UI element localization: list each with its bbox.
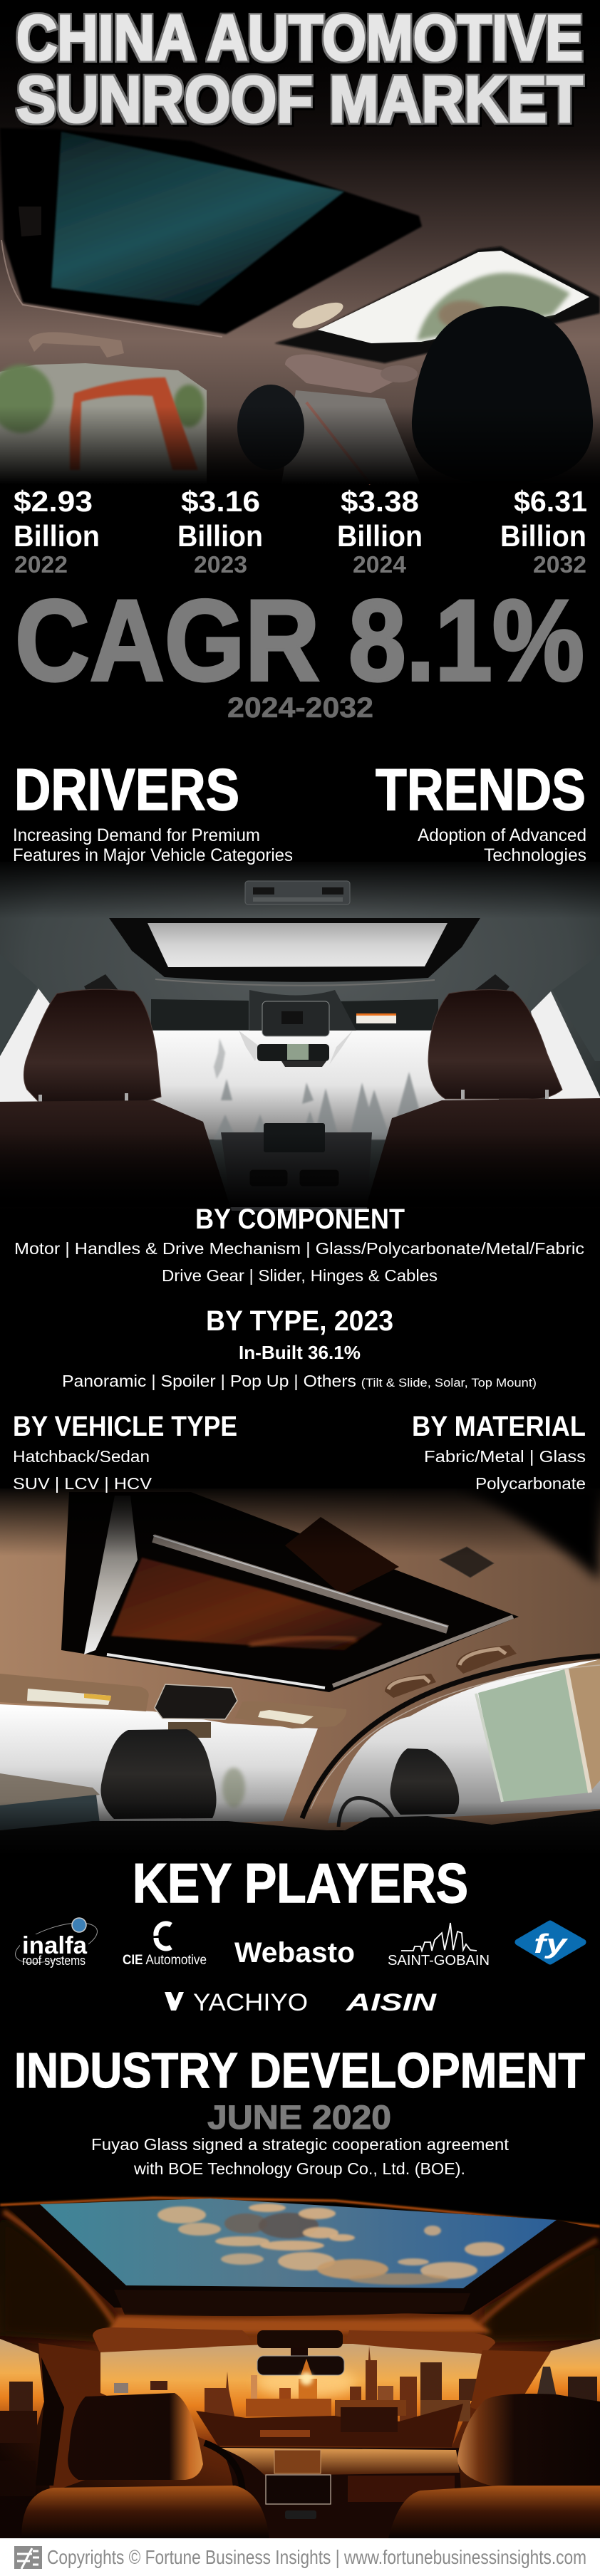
side window right bbox=[531, 991, 600, 1111]
panel: by vehicle type: SUV | LCV | HCV bbox=[13, 1474, 152, 1493]
stat: 2032: 2032 bbox=[533, 551, 586, 578]
logo: Saint-Gobain bbox=[388, 1923, 490, 1968]
panel: drivers: Features in Major Vehicle Categories bbox=[13, 845, 293, 865]
sun visors bbox=[0, 1674, 149, 1711]
panel: by material: BY MATERIAL bbox=[412, 1411, 586, 1442]
logo: CIE Automotive: CIE Automotive bbox=[123, 1953, 207, 1968]
sky through sunroof bbox=[40, 2199, 557, 2288]
stat: 2024: Billion bbox=[337, 519, 423, 553]
heading: by type: BY TYPE, 2023 bbox=[206, 1305, 393, 1337]
panel: trends: Technologies bbox=[484, 845, 586, 865]
sun visors bbox=[151, 999, 249, 1030]
stat: 2023: $3.16 bbox=[181, 485, 260, 518]
logo: Aisin: AISIN bbox=[346, 1989, 438, 2016]
development description: Fuyao Glass signed a strategic cooperation agreement bbox=[91, 2135, 510, 2154]
grab handles bbox=[456, 1645, 517, 1674]
windshield bbox=[107, 1031, 499, 1140]
stat: 2022: Billion bbox=[14, 519, 100, 553]
front left headrest bbox=[100, 1729, 217, 1819]
panel: trends bbox=[376, 756, 586, 865]
rearview mirror bbox=[257, 2347, 344, 2385]
side window left bbox=[0, 989, 56, 1104]
steering wheel bbox=[205, 2443, 242, 2493]
left seat bbox=[21, 2486, 269, 2538]
development description bbox=[91, 2135, 510, 2178]
sunroof opening bbox=[61, 1492, 519, 1692]
sunroof frame bbox=[7, 2199, 600, 2315]
stat: 2032: $6.31 bbox=[514, 485, 587, 518]
development date: JUNE 2020 bbox=[207, 2098, 391, 2136]
stat: 2023: 2023 bbox=[194, 551, 247, 578]
windshield bbox=[100, 2344, 482, 2447]
development description: with BOE Technology Group Co., Ltd. (BOE). bbox=[133, 2159, 465, 2178]
stat: 2024: $3.38 bbox=[341, 485, 419, 518]
stat: 2024 bbox=[337, 485, 423, 578]
overhead console bbox=[155, 1684, 237, 1719]
logo: inalfa roof systems bbox=[11, 1915, 102, 1971]
heading: by component: BY COMPONENT bbox=[195, 1204, 405, 1235]
stat: 2023: Billion bbox=[177, 519, 263, 553]
pillars bbox=[38, 2343, 100, 2493]
overhead control panel bbox=[245, 881, 350, 904]
title bbox=[16, 3, 583, 136]
panel: by material: Polycarbonate bbox=[475, 1474, 586, 1493]
icon: Fortune Business Insights logo bbox=[14, 2546, 42, 2569]
logo: CIE Automotive bbox=[123, 1924, 207, 1968]
stat: 2022: 2022 bbox=[14, 551, 68, 578]
stat: 2032: Billion bbox=[500, 519, 586, 553]
CAGR period: 2024-2032 bbox=[227, 692, 373, 724]
right headrest bbox=[457, 2394, 600, 2488]
logo: Saint-Gobain: SAINT-GOBAIN bbox=[388, 1953, 490, 1968]
panel: by vehicle type: BY VEHICLE TYPE bbox=[13, 1411, 237, 1442]
stat: 2022 bbox=[14, 485, 100, 578]
panel: by material: Fabric/Metal | Glass bbox=[424, 1447, 586, 1466]
panel: drivers bbox=[13, 756, 293, 865]
image: sunroof interior hero bbox=[0, 0, 600, 484]
right seat bbox=[365, 1098, 600, 1211]
side window bbox=[328, 1659, 600, 1823]
image: cabin looking forward with sunroof bbox=[0, 858, 600, 1211]
panel: by vehicle type: Hatchback/Sedan bbox=[13, 1447, 150, 1466]
heading: key players: KEY PLAYERS bbox=[133, 1852, 468, 1914]
list: components: Drive Gear | Slider, Hinges & Cables bbox=[162, 1266, 438, 1285]
panel: trends: Adoption of Advanced bbox=[418, 825, 586, 845]
right headrest bbox=[428, 990, 562, 1099]
windshield bbox=[0, 1704, 318, 1828]
list: types: Panoramic | Spoiler | Pop Up | Others (Tilt & Slide, Solar, Top Mount) bbox=[62, 1372, 537, 1390]
roof trim bbox=[93, 2327, 251, 2352]
left headrest bbox=[68, 2393, 203, 2480]
stat: in-built share: In-Built 36.1% bbox=[239, 1342, 361, 1363]
stat: 2024: 2024 bbox=[353, 551, 407, 578]
list: components: Motor | Handles & Drive Mechanism | Glass/Polycarbonate/Metal/Fabric bbox=[14, 1239, 584, 1258]
image: open sunroof with tan headliner bbox=[0, 1485, 600, 1872]
stat: 2022: $2.93 bbox=[14, 485, 93, 518]
left seat bbox=[0, 1100, 232, 1211]
logo: Yachiyo: YACHIYO bbox=[193, 1989, 308, 2016]
logo: Fuyao diamond: fy bbox=[534, 1929, 569, 1959]
heading: by component bbox=[14, 1204, 584, 1285]
logo: inalfa roof systems: inalfa bbox=[22, 1932, 88, 1959]
dashboard bbox=[221, 1132, 372, 1211]
logo: inalfa roof systems: roof systems bbox=[22, 1954, 86, 1968]
seats and dash bbox=[0, 1810, 600, 1870]
heading: by type bbox=[62, 1305, 537, 1390]
image: sunset panoramic sunroof bbox=[0, 2194, 600, 2538]
panel: by vehicle type bbox=[13, 1411, 237, 1493]
front right headrest bbox=[390, 1748, 459, 1815]
stat: 2032 bbox=[500, 485, 587, 578]
logo: Webasto: Webasto bbox=[234, 1937, 355, 1968]
city skyline bbox=[114, 2346, 477, 2424]
panel: by material bbox=[412, 1411, 586, 1493]
left headrest bbox=[24, 989, 161, 1102]
side windows bbox=[0, 2339, 44, 2437]
logo: Fuyao diamond bbox=[518, 1924, 583, 1961]
dashboard bbox=[220, 2447, 463, 2538]
list: components bbox=[14, 1239, 584, 1285]
footer band bbox=[0, 2538, 600, 2576]
panel: drivers: DRIVERS bbox=[14, 756, 239, 823]
stat: 2023 bbox=[177, 485, 263, 578]
right seat bbox=[388, 2486, 600, 2538]
panel: drivers: Increasing Demand for Premium bbox=[13, 825, 260, 845]
